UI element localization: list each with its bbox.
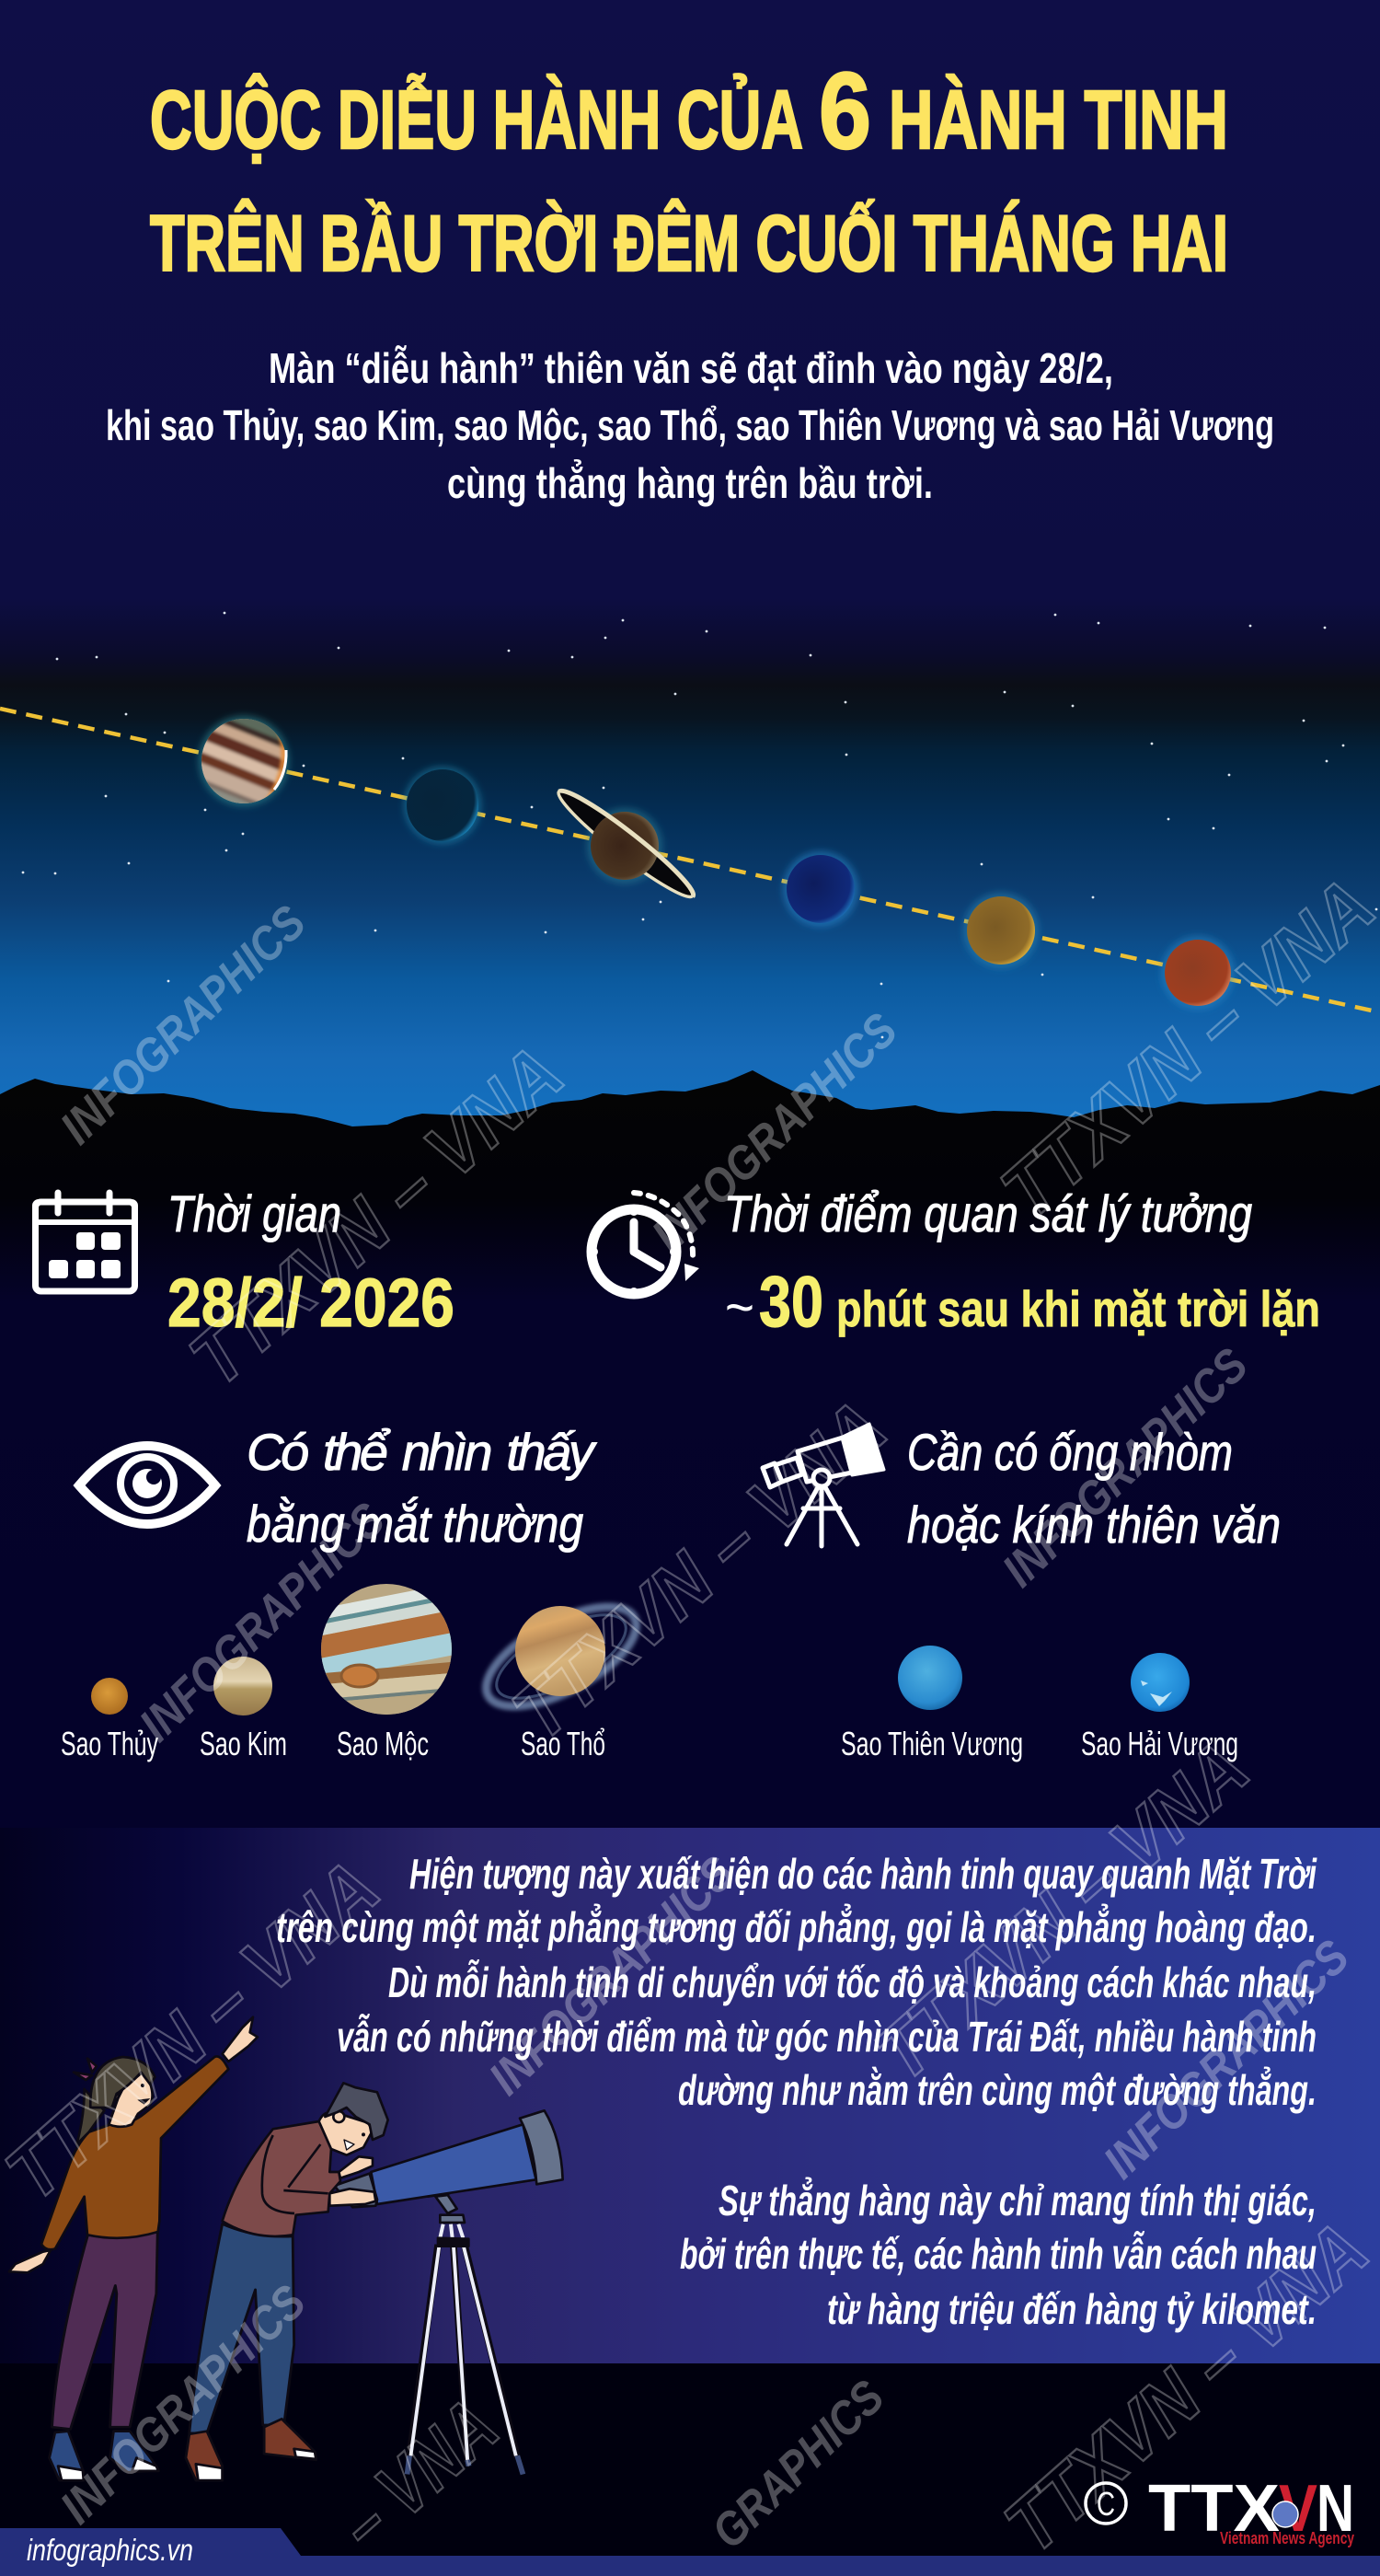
watermarks: INFOGRAPHICS [51,895,316,1155]
tripod legs [408,2245,523,2474]
intro paragraph: cùng thẳng hàng trên bầu trời. [447,458,933,507]
watermarks [0,861,1380,2569]
footer source text: infographics.vn [27,2533,193,2567]
TTXVN logo with copyright mark: V [1279,2472,1317,2546]
planet: Venus [213,1657,272,1715]
icon: clock with dotted arrow [589,1193,699,1297]
time block: Thời gian [167,1184,341,1242]
footer blue bar [0,2528,1380,2576]
binoculars text: hoặc kính thiên văn [907,1496,1281,1554]
label: Sao Hải Vương: Sao Hải Vương [1081,1725,1238,1762]
illustration: man looking through a telescope [186,2083,563,2480]
intro paragraph [106,344,1274,507]
ideal observation time block: 30 [759,1261,823,1342]
dashed ecliptic line [0,709,1380,1012]
TTXVN logo with copyright mark: TTX [1148,2472,1280,2546]
label: Sao Mộc: Sao Mộc [337,1725,429,1762]
time block [167,1184,454,1341]
planet: Neptune [1131,1653,1190,1712]
stars [23,613,1376,1037]
naked eye text: bằng mắt thường [247,1495,583,1553]
TTXVN logo with copyright mark: N [1317,2472,1354,2546]
planet row in the sky [170,692,1235,1010]
watermarks: GRAPHICS [702,2370,895,2559]
time block: 28/2/ 2026 [167,1265,454,1341]
sky planet: deep blue [783,851,858,927]
watermarks: TTXVN – VNA [174,1029,579,1402]
telescope and man upper body [223,2083,563,2247]
title: 6 [819,51,871,172]
watermarks: INFOGRAPHICS [479,1846,745,2106]
watermarks: INFOGRAPHICS [642,1003,908,1263]
title [150,51,1228,288]
icon: eye [79,1446,215,1524]
sky planet: red [1161,936,1235,1010]
planet: Jupiter [321,1584,452,1715]
icon: telescope [763,1424,884,1546]
planet: Saturn [472,1587,650,1727]
panel: explanation background band [0,1828,1380,2363]
TTXVN logo with copyright mark: C [1097,2485,1115,2523]
label: Sao Thổ: Sao Thổ [521,1725,605,1762]
illustration: girl pointing at the sky [9,2017,258,2480]
label: Sao Kim: Sao Kim [200,1725,287,1762]
naked eye text: Có thể nhìn thấy [247,1423,597,1481]
watermarks: – VNA [322,2383,513,2566]
panel: sky background [0,0,1380,1160]
title: HÀNH TINH [889,74,1228,167]
icon: calendar [35,1193,135,1291]
binoculars text: Cần có ống nhòm [907,1423,1233,1481]
planet: Mercury [91,1678,128,1715]
girl legs and shoes [50,2230,158,2480]
watermarks: INFOGRAPHICS [993,1338,1259,1598]
naked eye text [247,1423,597,1553]
sky planet: Saturn with ring [551,782,700,906]
planet: Uranus [898,1646,962,1710]
title: CUỘC DIỄU HÀNH CỦA [150,73,803,167]
explanation text [276,1850,1317,2333]
ideal observation time block: Thời điểm quan sát lý tưởng [724,1184,1252,1242]
girl upper body [9,2017,258,2272]
sky planet: Jupiter [194,712,293,810]
dark ground strip [0,2363,1380,2556]
watermarks: TTXVN – VNA [859,1724,1264,2097]
binoculars text [907,1423,1281,1554]
sky planet: dark teal [404,767,481,844]
watermarks: INFOGRAPHICS [130,1493,396,1752]
label: Sao Thiên Vương: Sao Thiên Vương [841,1725,1023,1762]
label: Sao Thủy: Sao Thủy [61,1725,158,1762]
TTXVN logo with copyright mark [1086,2472,1354,2547]
watermarks: TTXVN – VNA [0,1843,395,2216]
intro paragraph: Màn “diễu hành” thiên văn sẽ đạt đỉnh vào ngày 28/2, [269,344,1113,392]
ideal observation time block: ~ [725,1276,754,1338]
watermarks: TTXVN – VNA [497,1383,902,1756]
watermarks: INFOGRAPHICS [51,2275,316,2535]
man legs and shoes [186,2224,316,2480]
mountain silhouette and lower dark background [0,1070,1380,2576]
sky planet: gold [963,893,1039,968]
ideal observation time block [724,1184,1320,1342]
